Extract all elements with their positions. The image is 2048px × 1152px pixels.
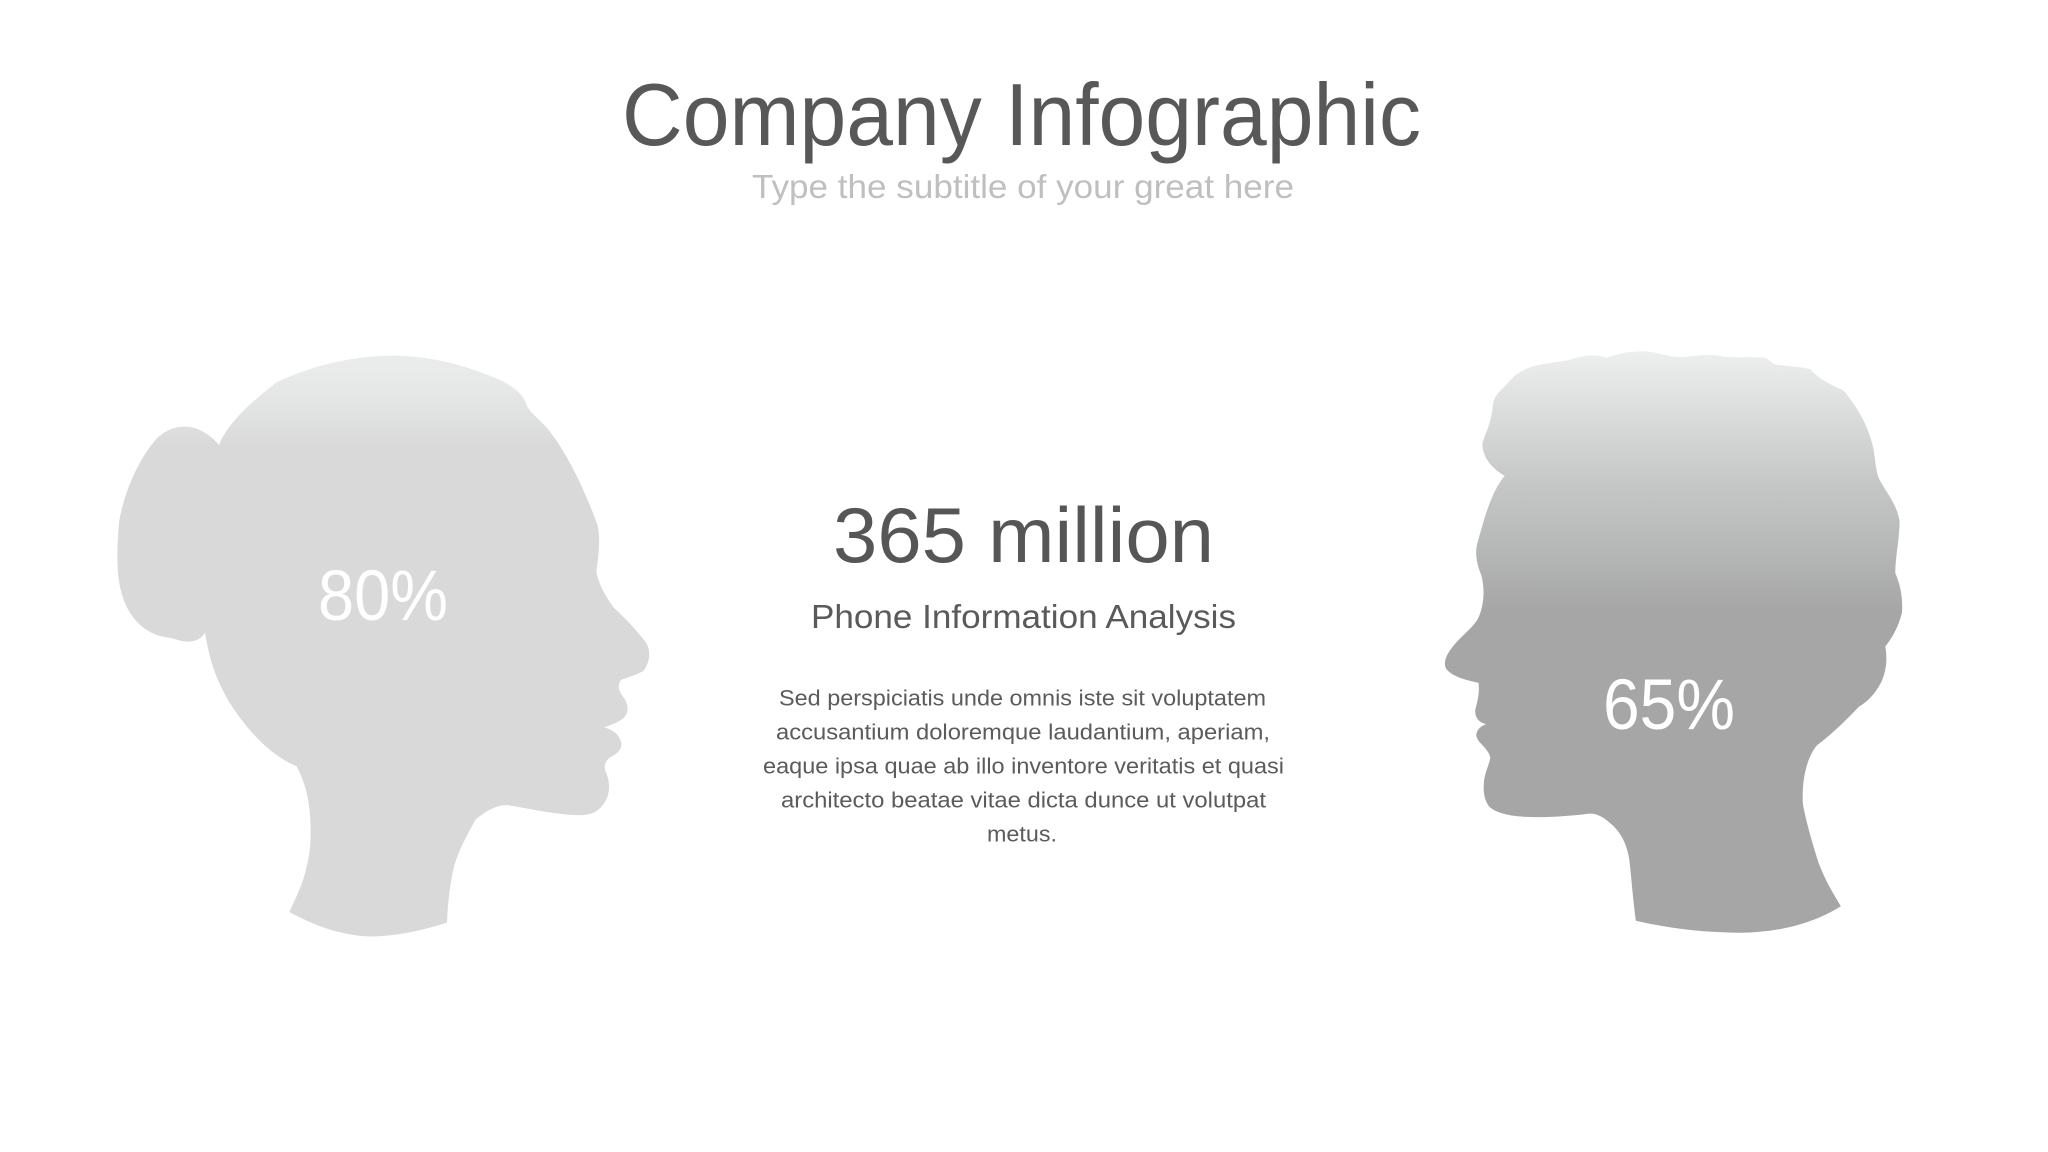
statistic: 365 million: 365 million — [833, 491, 1214, 579]
panel: central statistic — [763, 491, 1284, 846]
body text — [763, 686, 1284, 846]
body text: architecto beatae vitae dicta dunce ut volutpat — [781, 788, 1267, 812]
icon: woman profile — [117, 356, 649, 937]
panel: woman head silhouette — [117, 356, 649, 937]
title: Company Infographic — [622, 65, 1421, 164]
panel: man head silhouette — [1445, 351, 1902, 933]
body text: metus. — [987, 822, 1057, 846]
icon: man profile — [1445, 351, 1902, 933]
body text: Sed perspiciatis unde omnis iste sit voluptatem — [779, 686, 1266, 710]
body text: accusantium doloremque laudantium, aperiam, — [776, 720, 1270, 744]
body text: eaque ipsa quae ab illo inventore veritatis et quasi — [763, 754, 1284, 778]
subtitle: Type the subtitle of your great here — [752, 169, 1294, 206]
heading: phone information analysis: Phone Information Analysis — [811, 599, 1236, 636]
percentage: 65%: 65% — [1603, 666, 1735, 745]
percentage: 80%: 80% — [318, 557, 448, 636]
